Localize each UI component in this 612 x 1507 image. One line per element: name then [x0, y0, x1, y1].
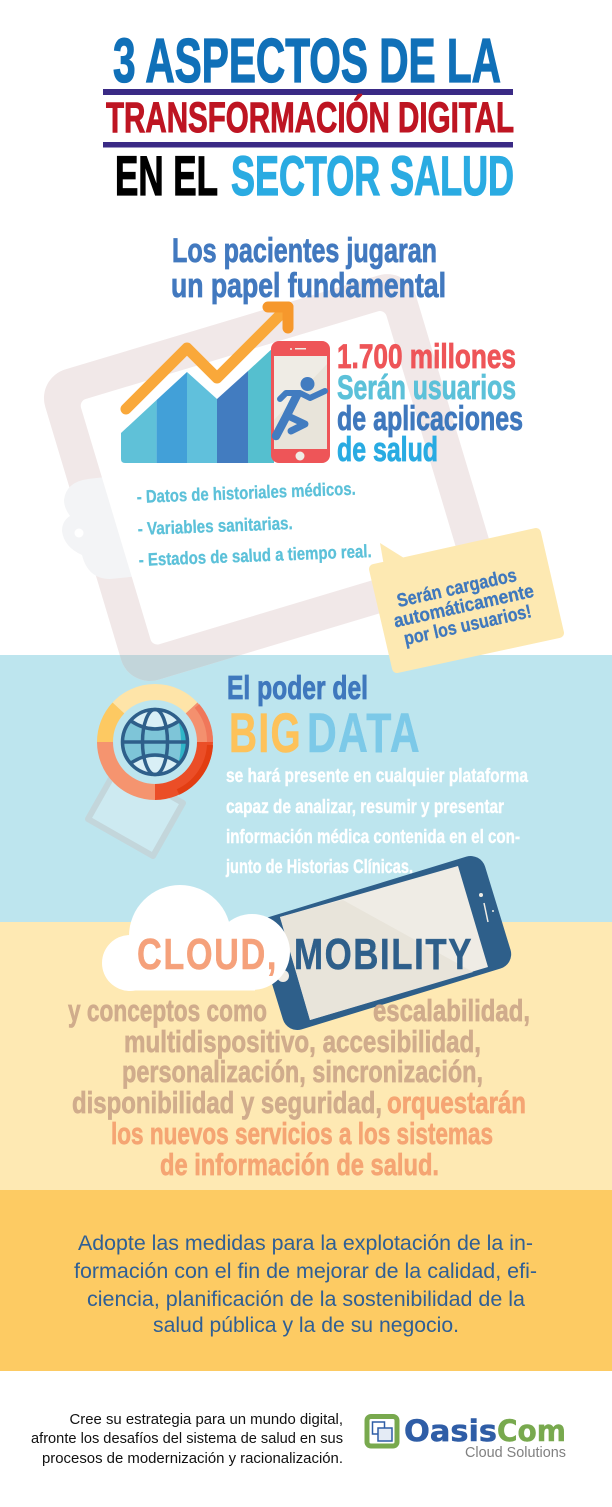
data list: - Datos de historiales médicos.: [136, 479, 356, 507]
section heading: big data: BIG: [229, 701, 302, 764]
section heading: big data: [227, 669, 421, 764]
callout: uploaded by users: automáticamente: [392, 581, 536, 632]
tablet bottom edge over blue band: [120, 655, 240, 681]
call to action text: formación con el fin de mejorar de la calidad, efi-: [74, 1260, 537, 1283]
callout: uploaded by users: por los usuarios!: [402, 601, 534, 650]
cloud and mobility description: [68, 993, 530, 1182]
section heading: big data: DATA: [307, 701, 421, 764]
icon: rising arrow: [126, 307, 288, 409]
cloud and mobility description: de información de salud.: [160, 1147, 439, 1182]
call to action text: ciencia, planificación de la sostenibilidad de la: [87, 1288, 525, 1311]
section heading: big data: El poder del: [227, 669, 368, 706]
section heading: cloud, mobility: MOBILITY: [294, 930, 473, 979]
logo: OasisCom: [367, 1414, 566, 1461]
icon: tablet outline: [37, 267, 500, 688]
cloud and mobility description: orquestarán: [387, 1085, 526, 1120]
icon: mobile phone landscape: [253, 852, 515, 1034]
icon: cloud: [102, 885, 290, 991]
big data description: información médica contenida en el con-: [226, 827, 520, 848]
section heading: patients: [171, 232, 446, 305]
big data description: [225, 766, 528, 878]
footer text: procesos de modernización y racionalización.: [42, 1451, 343, 1467]
logo: OasisCom: Com: [497, 1414, 566, 1448]
statistic text: 1.700 millones: de salud: [337, 431, 438, 469]
logo: OasisCom: Cloud Solutions: [465, 1445, 566, 1461]
section heading: cloud, mobility: CLOUD,: [137, 930, 278, 979]
cloud and mobility description: disponibilidad y seguridad,: [72, 1085, 382, 1120]
statistic text: 1.700 millones: [337, 338, 523, 469]
call to action text: [74, 1232, 537, 1337]
icon: phone with runner: [271, 341, 330, 463]
statistic text: 1.700 millones: de aplicaciones: [337, 400, 523, 438]
cloud and mobility description: y conceptos como: [68, 993, 267, 1028]
statistic text: 1.700 millones: 1.700 millones: [337, 338, 516, 376]
icon: bar chart: [121, 347, 274, 463]
cloud and mobility description: escalabilidad,: [373, 993, 530, 1028]
big data description: se hará presente en cualquier plataforma: [226, 766, 528, 787]
big data description: capaz de analizar, resumir y presentar: [226, 797, 504, 818]
callout: uploaded by users: Serán cargados: [395, 565, 519, 612]
data list: - Variables sanitarias.: [137, 513, 293, 539]
call to action text: Adopte las medidas para la explotación de la in-: [78, 1232, 533, 1255]
title: [103, 27, 514, 207]
icon: globe with ring: [105, 692, 210, 792]
footer text: [31, 1412, 343, 1467]
section heading: patients: Los pacientes jugaran: [172, 232, 437, 270]
footer text: afronte los desafíos del sistema de salud en sus: [31, 1431, 343, 1447]
big data description: junto de Historias Clínicas.: [225, 857, 413, 878]
callout: uploaded by users: [374, 533, 559, 668]
call to action text: salud pública y la de su negocio.: [153, 1314, 459, 1337]
logo: OasisCom: Oasis: [404, 1414, 497, 1448]
cloud and mobility description: multidispositivo, accesibilidad,: [124, 1024, 481, 1059]
statistic text: 1.700 millones: Serán usuarios: [337, 369, 516, 407]
footer text: Cree su estrategia para un mundo digital,: [70, 1412, 343, 1428]
cloud and mobility description: personalización, sincronización,: [122, 1054, 483, 1089]
data list: [136, 479, 372, 570]
section heading: cloud, mobility: [137, 930, 473, 979]
section heading: patients: un papel fundamental: [171, 267, 446, 305]
icon: small tablet behind globe: [88, 766, 183, 856]
title: EN EL: [115, 144, 218, 207]
data list: - Estados de salud a tiempo real.: [138, 541, 372, 570]
